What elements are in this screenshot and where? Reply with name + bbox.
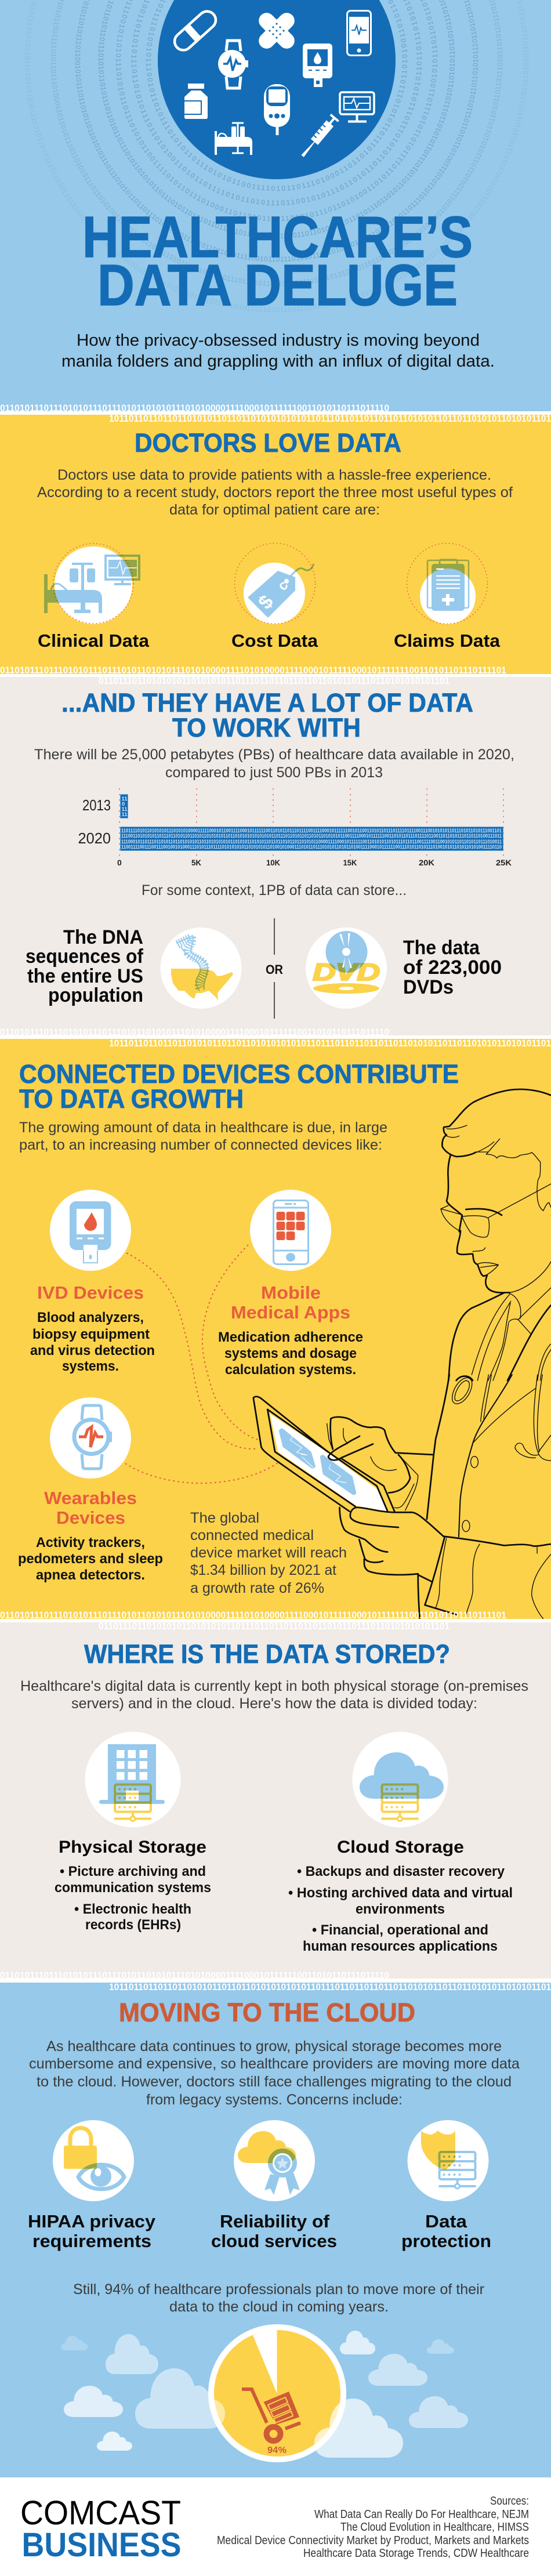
panel: connected devices (0, 1039, 551, 1621)
divider with OR: OR (266, 962, 283, 977)
title: Medical Apps (231, 1302, 350, 1323)
intro text (19, 1119, 387, 1153)
closing text: Still, 94% of healthcare professionals plan to move more of their (73, 2281, 484, 2298)
logo: Comcast Business: BUSINESS (22, 2526, 181, 2564)
intro text: cumbersome and expensive, so healthcare providers are moving more data (29, 2056, 520, 2072)
cloud storage text: • Backups and disaster recovery (297, 1864, 505, 1879)
description: systems and dosage (224, 1346, 357, 1361)
x-axis labels: 15K (343, 858, 357, 867)
icon: cloud storage (353, 1732, 448, 1827)
label: Data (425, 2211, 467, 2231)
description: Activity trackers, (36, 1535, 145, 1550)
intro text: compared to just 500 PBs in 2013 (165, 765, 383, 781)
callout: DVD text: The data (403, 937, 480, 959)
cloud storage text: human resources applications (303, 1939, 498, 1954)
physical storage text: communication systems (55, 1880, 211, 1896)
description: calculation systems. (225, 1362, 356, 1378)
icon: handheld meter (264, 84, 290, 135)
bar: 2013: 11 (122, 806, 128, 813)
icon: physical storage building (85, 1732, 181, 1827)
physical storage text (55, 1838, 211, 1933)
intro text: servers) and in the cloud. Here's how the data is divided today: (71, 1695, 477, 1712)
description: Medication adherence (218, 1329, 363, 1345)
logo: Comcast Business: COMCAST (20, 2494, 181, 2532)
title (231, 1282, 350, 1323)
title: Wearables (44, 1488, 137, 1508)
description: and virus detection (30, 1343, 155, 1358)
panel: where is the data stored (0, 1622, 551, 1979)
physical storage text: • Picture archiving and (60, 1864, 206, 1879)
heading (19, 1059, 459, 1114)
x-axis labels: 20K (419, 858, 434, 867)
icon: syringe (299, 114, 339, 159)
closing text (73, 2281, 484, 2315)
intro text: There will be 25,000 petabytes (PBs) of healthcare data available in 2020, (34, 747, 514, 763)
dashed connector lines (125, 1245, 278, 1483)
icon: DNA over US map (160, 927, 241, 1009)
closing text: data to the cloud in coming years. (169, 2299, 389, 2315)
stat: market growth text: $1.34 billion by 2021 at (190, 1562, 336, 1578)
context line: For some context, 1PB of data can store... (142, 882, 407, 898)
subtitle: How the privacy-obsessed industry is moving beyond (77, 331, 480, 350)
intro text: Doctors use data to provide patients with a hassle-free experience. (57, 467, 491, 483)
bar: 2013: 11 (122, 811, 128, 818)
stat: market growth text: a growth rate of 26% (190, 1580, 324, 1596)
illustration: doctor hands and tablet (253, 1375, 551, 1621)
intro text: from legacy systems. Concerns include: (146, 2092, 403, 2108)
binary divider strips between sections (0, 403, 551, 1992)
title: HEALTHCARE’S (82, 205, 473, 270)
binary divider strips between sections: 011011101101010101101010101101110110110110110110101101110110101010101101 (99, 1621, 449, 1632)
callout: DNA text: sequences of (26, 945, 144, 968)
label: Claims Data (394, 631, 501, 651)
x-axis labels: 10K (266, 858, 280, 867)
cloud storage text: environments (356, 1901, 445, 1917)
binary divider strips between sections: 01101011101110101011101110101101010111010100001111010100001111000101111100010111111100110101101110111101 (0, 1610, 506, 1621)
icon: smart watch (218, 41, 248, 88)
heading: ...AND THEY HAVE A LOT OF DATA (61, 688, 473, 718)
description: systems. (62, 1358, 119, 1374)
bar chart (78, 788, 512, 867)
panel: header (0, 0, 551, 411)
cloud storage text (288, 1838, 513, 1954)
title (44, 1488, 137, 1528)
icon: server hand truck (242, 2389, 300, 2441)
binary divider strips between sections: 01101011101110101011101110101101010111010100001111000101111110011010110111011110 (0, 1970, 389, 1981)
intro text: The growing amount of data in healthcare is due, in large (19, 1119, 387, 1136)
icon: claims data (407, 543, 487, 624)
intro text (20, 1678, 528, 1712)
heading: CONNECTED DEVICES CONTRIBUTE (19, 1059, 459, 1089)
tablet screen (270, 1414, 387, 1512)
heading: DOCTORS LOVE DATA (135, 428, 401, 458)
intro text: to the cloud. However, doctors still face challenges migrating to the cloud (37, 2074, 512, 2090)
label: Cost Data (231, 631, 318, 651)
title: Devices (56, 1508, 125, 1528)
heading: TO WORK WITH (172, 713, 361, 742)
callout: DVD text: DVDs (403, 976, 454, 998)
blue circle with medical icons (158, 0, 396, 179)
label (28, 2211, 156, 2251)
icon: heart monitor (340, 92, 374, 122)
stat: market growth text: device market will reach (190, 1545, 347, 1561)
title: Mobile (261, 1282, 321, 1303)
logo: Comcast Business (20, 2494, 181, 2564)
icon: cost data: $ (254, 591, 278, 614)
card: wearable devices (18, 1397, 163, 1583)
icon: DVD: DVD (313, 958, 380, 986)
bar: 2013: 0 (122, 801, 125, 807)
x-axis labels (117, 858, 512, 867)
label: cloud services (211, 2231, 337, 2251)
intro text (37, 467, 513, 518)
intro text: Healthcare's digital data is currently kept in both physical storage (on-premises (20, 1678, 528, 1694)
intro text: According to a recent study, doctors report the three most useful types of (37, 484, 513, 501)
description: biopsy equipment (32, 1327, 150, 1342)
binary divider strips between sections: 01101011101110101011101110101101010111010100001111010100001111000101111100010111111100110101101110111101 (0, 665, 506, 676)
stat: market growth text: The global (190, 1510, 259, 1526)
y-axis labels: 2020 (78, 829, 111, 847)
icon: hospital bed with IV (216, 123, 252, 155)
icon: smartphone (347, 10, 371, 56)
label: Reliability of (220, 2211, 330, 2231)
x-axis labels: 25K (496, 858, 512, 867)
callout: DNA text: population (48, 984, 143, 1006)
icon: data protection shield (407, 2120, 488, 2201)
label: HIPAA privacy (28, 2211, 156, 2231)
title (82, 205, 473, 318)
icon: cloud reliability badge (234, 2120, 315, 2201)
physical storage text: Physical Storage (59, 1838, 206, 1857)
stat: market growth text: connected medical (190, 1527, 314, 1544)
description (218, 1329, 363, 1378)
subtitle: manila folders and grappling with an influx of digital data. (61, 352, 495, 371)
panel: doctors love data (0, 415, 551, 674)
description: Blood analyzers, (37, 1310, 144, 1325)
binary divider strips between sections: 01101011101110101011101110101101010111010100001111000101111110011010110111011110 (0, 1027, 389, 1038)
y-axis labels (78, 796, 111, 847)
panel: moving to the cloud (0, 1983, 551, 2477)
intro text (34, 747, 514, 781)
icon: clinical data (44, 544, 139, 624)
bar: 2013 (121, 795, 128, 818)
pie chart: 94 percent (208, 2324, 346, 2462)
physical storage text: • Electronic health (74, 1901, 191, 1917)
subtitle (61, 331, 495, 371)
x-axis labels: 0 (117, 858, 122, 867)
label (211, 2211, 337, 2251)
icon: medicine bottle (184, 84, 208, 119)
bar: 2013: 11 (122, 796, 128, 802)
intro text (29, 2038, 520, 2108)
description (30, 1310, 155, 1374)
binary divider strips between sections: 01101011101110101011101110101101010111010100001111000101111110011010110111011110 (0, 403, 389, 414)
label: 94% (267, 2445, 287, 2455)
label: Clinical Data (38, 631, 150, 651)
icon: pill (171, 8, 219, 54)
intro text: As healthcare data continues to grow, physical storage becomes more (46, 2038, 502, 2055)
icon: HIPAA lock and eye (53, 2120, 134, 2201)
sources (217, 2495, 529, 2560)
icon: IVD meter (70, 1201, 111, 1263)
description: apnea detectors. (36, 1567, 145, 1583)
callout: DNA text (26, 926, 144, 1006)
title: DATA DELUGE (97, 253, 458, 318)
footer (0, 2477, 551, 2576)
heading (61, 688, 473, 742)
callout: DVD text (403, 937, 502, 998)
binary divider strips between sections: 011011101101010101101010101101110110110110110110101101110110101010101101 (99, 675, 449, 686)
panel: and they have a lot of data (0, 677, 551, 1035)
icon: blood glucose meter (303, 44, 332, 87)
heading: WHERE IS THE DATA STORED? (84, 1639, 450, 1669)
intro text: data for optimal patient care are: (169, 502, 380, 518)
title: IVD Devices (37, 1282, 144, 1303)
physical storage text: records (EHRs) (85, 1917, 181, 1933)
clouds around pie (61, 2331, 468, 2458)
description (18, 1535, 163, 1583)
card: IVD devices (30, 1190, 155, 1374)
stat: market growth text (190, 1510, 347, 1596)
heading: TO DATA GROWTH (19, 1084, 244, 1114)
cloud storage text: • Hosting archived data and virtual (288, 1885, 513, 1901)
callout: DNA text: The DNA (63, 926, 143, 948)
icon: watch (74, 1405, 112, 1469)
y-axis labels: 2013 (82, 796, 111, 814)
heading: MOVING TO THE CLOUD (119, 1998, 415, 2027)
icon: DVD (306, 927, 387, 1009)
bar: 2020 (121, 827, 503, 850)
sources: Sources: (490, 2495, 529, 2508)
label: requirements (32, 2231, 151, 2251)
tablet charts (279, 1429, 356, 1495)
callout: DNA text: the entire US (27, 965, 143, 987)
description: pedometers and sleep (18, 1551, 163, 1567)
label (401, 2211, 491, 2251)
illustration: doctor head and torso (441, 1089, 551, 1381)
x-axis labels: 5K (191, 858, 201, 867)
icon: bandage (256, 10, 298, 52)
intro text: part, to an increasing number of connected devices like: (19, 1137, 382, 1153)
card: mobile medical apps (218, 1190, 363, 1378)
callout: DVD text: of 223,000 (403, 957, 502, 979)
icon: app phone (273, 1201, 309, 1265)
label: protection (401, 2231, 491, 2251)
cloud storage text: • Financial, operational and (312, 1922, 488, 1938)
cloud storage text: Cloud Storage (337, 1838, 464, 1857)
icon: cost data (234, 543, 316, 624)
icon: cost data: c (274, 578, 292, 594)
